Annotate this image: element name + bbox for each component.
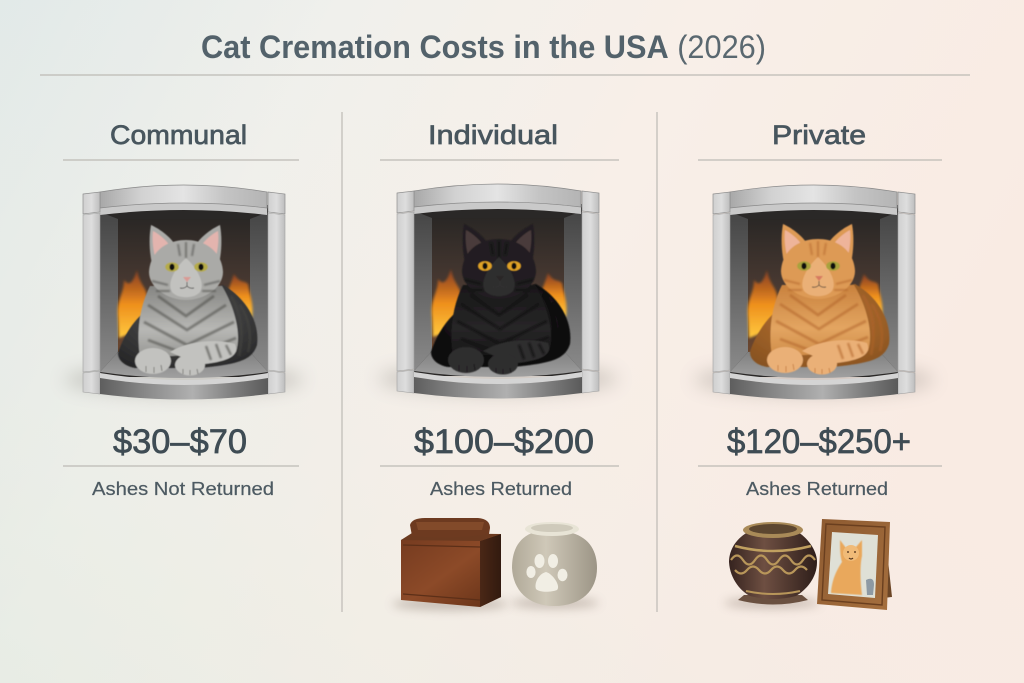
panel: individual (378, 120, 619, 610)
note: ashes not returned: Ashes Not Returned (92, 479, 274, 499)
panel: communal (63, 120, 304, 499)
icon: cremation chamber with black cat (378, 184, 618, 398)
panel: private (694, 120, 942, 610)
icon: framed cat photo (817, 519, 892, 610)
heading: communal: Communal (110, 120, 247, 150)
icon: cremation chamber with orange tabby cat (694, 185, 934, 400)
icon: engraved bronze urn (724, 522, 820, 608)
title: Cat Cremation Costs in the USA (2026) (201, 29, 766, 65)
note: ashes returned: Ashes Returned (746, 479, 888, 499)
icon: wooden box urn (392, 518, 508, 610)
note: ashes returned: Ashes Returned (430, 479, 572, 499)
price: private: $120–$250+ (727, 423, 911, 461)
heading: individual: Individual (428, 120, 558, 150)
icon: ceramic paw urn (511, 522, 599, 608)
icon: cremation chamber with grey tabby cat (64, 185, 304, 400)
price: individual: $100–$200 (414, 423, 594, 461)
heading: private: Private (772, 120, 866, 150)
price: communal: $30–$70 (113, 423, 247, 461)
